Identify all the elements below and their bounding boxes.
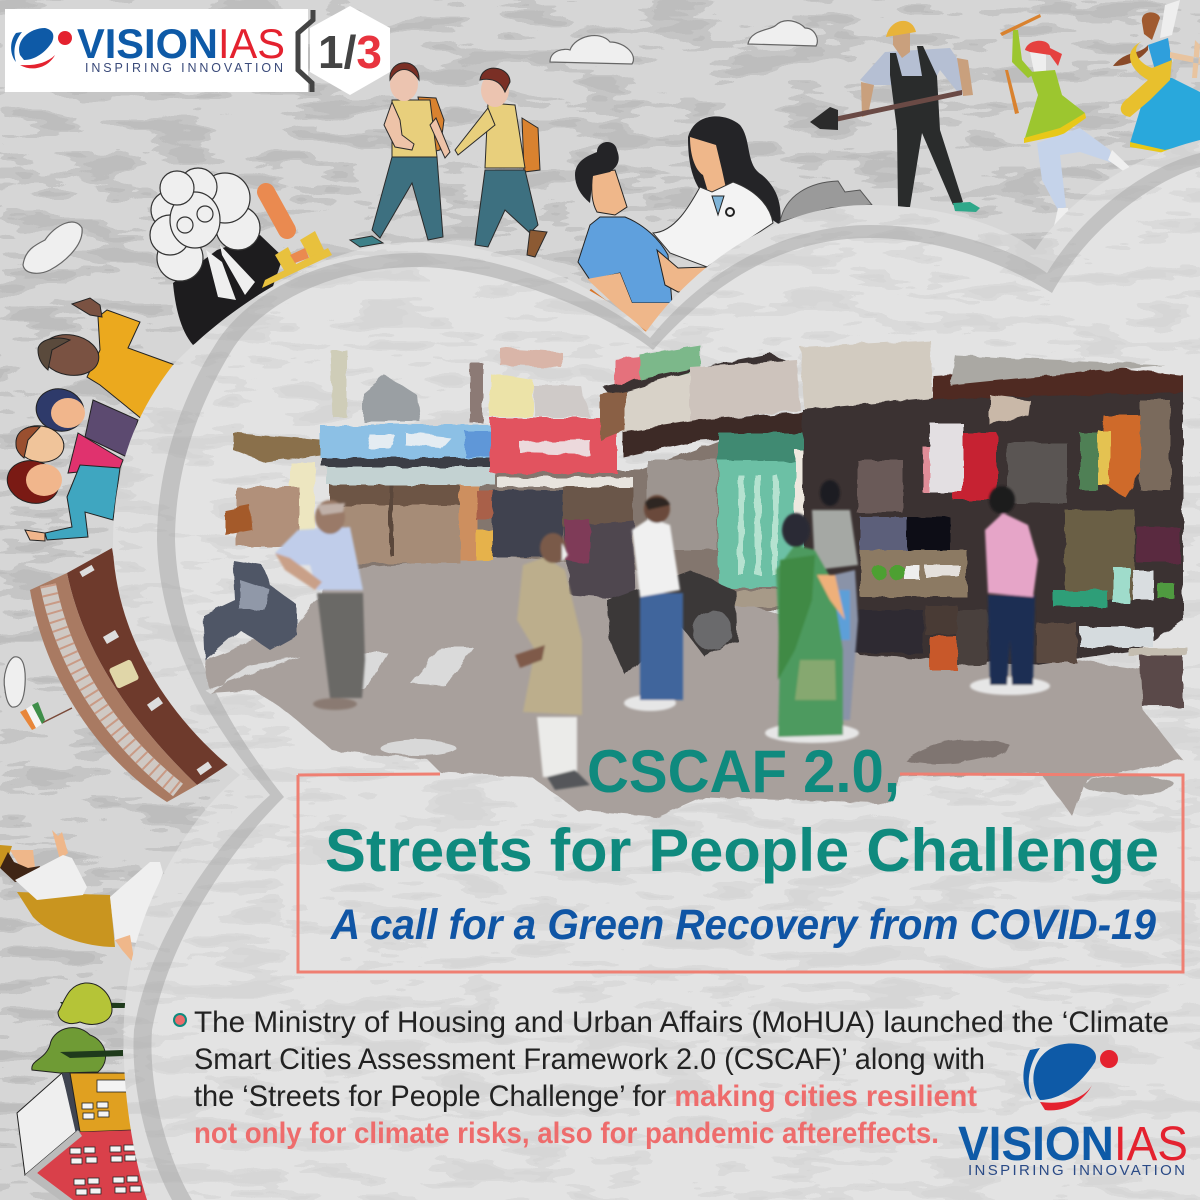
icon: flag <box>20 702 72 730</box>
person: light blue shirt grey trousers <box>317 593 365 698</box>
title line 2: Streets for People Challenge <box>325 817 1159 884</box>
right bike <box>607 570 737 675</box>
logo wordmark: VISIONIAS <box>77 20 285 67</box>
woman: green sari <box>776 545 843 737</box>
page badge 1/3 <box>298 6 390 95</box>
logo tagline: INSPIRING INNOVATION <box>968 1162 1185 1179</box>
shutters <box>330 485 460 563</box>
table and chairs <box>697 590 780 607</box>
person behind woman <box>812 510 858 570</box>
body text block: not only for climate risks, also for pandemic aftereffects. <box>194 1117 939 1150</box>
upper pale buildings <box>330 350 347 417</box>
icon: reclining man <box>0 830 163 965</box>
road crossing marks <box>205 647 473 693</box>
icon: parliament building <box>30 548 235 802</box>
page badge 1/3: 1/3 <box>318 26 382 78</box>
road patch in frame <box>1083 776 1175 794</box>
logo bottom right <box>958 1043 1188 1179</box>
green door <box>718 433 803 588</box>
red sign <box>490 418 617 473</box>
icon: small clouds <box>4 21 817 707</box>
shop interior <box>803 390 1183 665</box>
floor circles <box>624 695 676 711</box>
person: white shirt jeans <box>640 593 683 700</box>
road patch <box>380 740 456 756</box>
street photo illustration <box>203 340 1188 817</box>
icon: stone <box>780 181 872 222</box>
subtitle: A call for a Green Recovery from COVID-19 <box>330 901 1156 949</box>
blue sign <box>320 425 492 458</box>
heading frame <box>298 774 1183 972</box>
icon: bullet <box>174 1014 186 1026</box>
icon: dancers <box>1000 0 1200 226</box>
left bike <box>203 560 297 660</box>
person: pink shirt <box>988 595 1035 685</box>
floor circle pink man <box>970 677 1050 695</box>
shop backdrop <box>330 430 810 610</box>
body text block: Smart Cities Assessment Framework 2.0 (CSCAF)’ along with <box>194 1043 985 1076</box>
icon: houses and trees <box>17 983 150 1200</box>
logo wordmark: VISIONIAS <box>958 1118 1188 1171</box>
person: beige kurta <box>537 717 577 777</box>
icon: doctor and patient <box>575 116 781 333</box>
road <box>205 555 1183 817</box>
icon: worker with shovel <box>810 21 980 212</box>
icon: students <box>350 63 547 257</box>
logo header <box>5 9 308 92</box>
body text block <box>174 1006 1169 1150</box>
body text block: The Ministry of Housing and Urban Affairs (MoHUA) launched the ‘Climate <box>194 1006 1169 1039</box>
logo tagline: INSPIRING INNOVATION <box>85 61 283 75</box>
left building <box>233 433 320 462</box>
shop awnings <box>620 370 700 435</box>
icon: judge <box>150 168 332 345</box>
icon: logo globe <box>1023 1043 1118 1110</box>
road shadow <box>905 740 1010 764</box>
icon: group of people <box>2 298 175 541</box>
icon: logo globe <box>11 28 72 68</box>
floor circle woman <box>765 723 859 743</box>
child <box>833 570 858 720</box>
body text block: the ‘Streets for People Challenge’ for making cities resilient <box>194 1080 977 1113</box>
title line 1: CSCAF 2.0, <box>587 738 900 805</box>
